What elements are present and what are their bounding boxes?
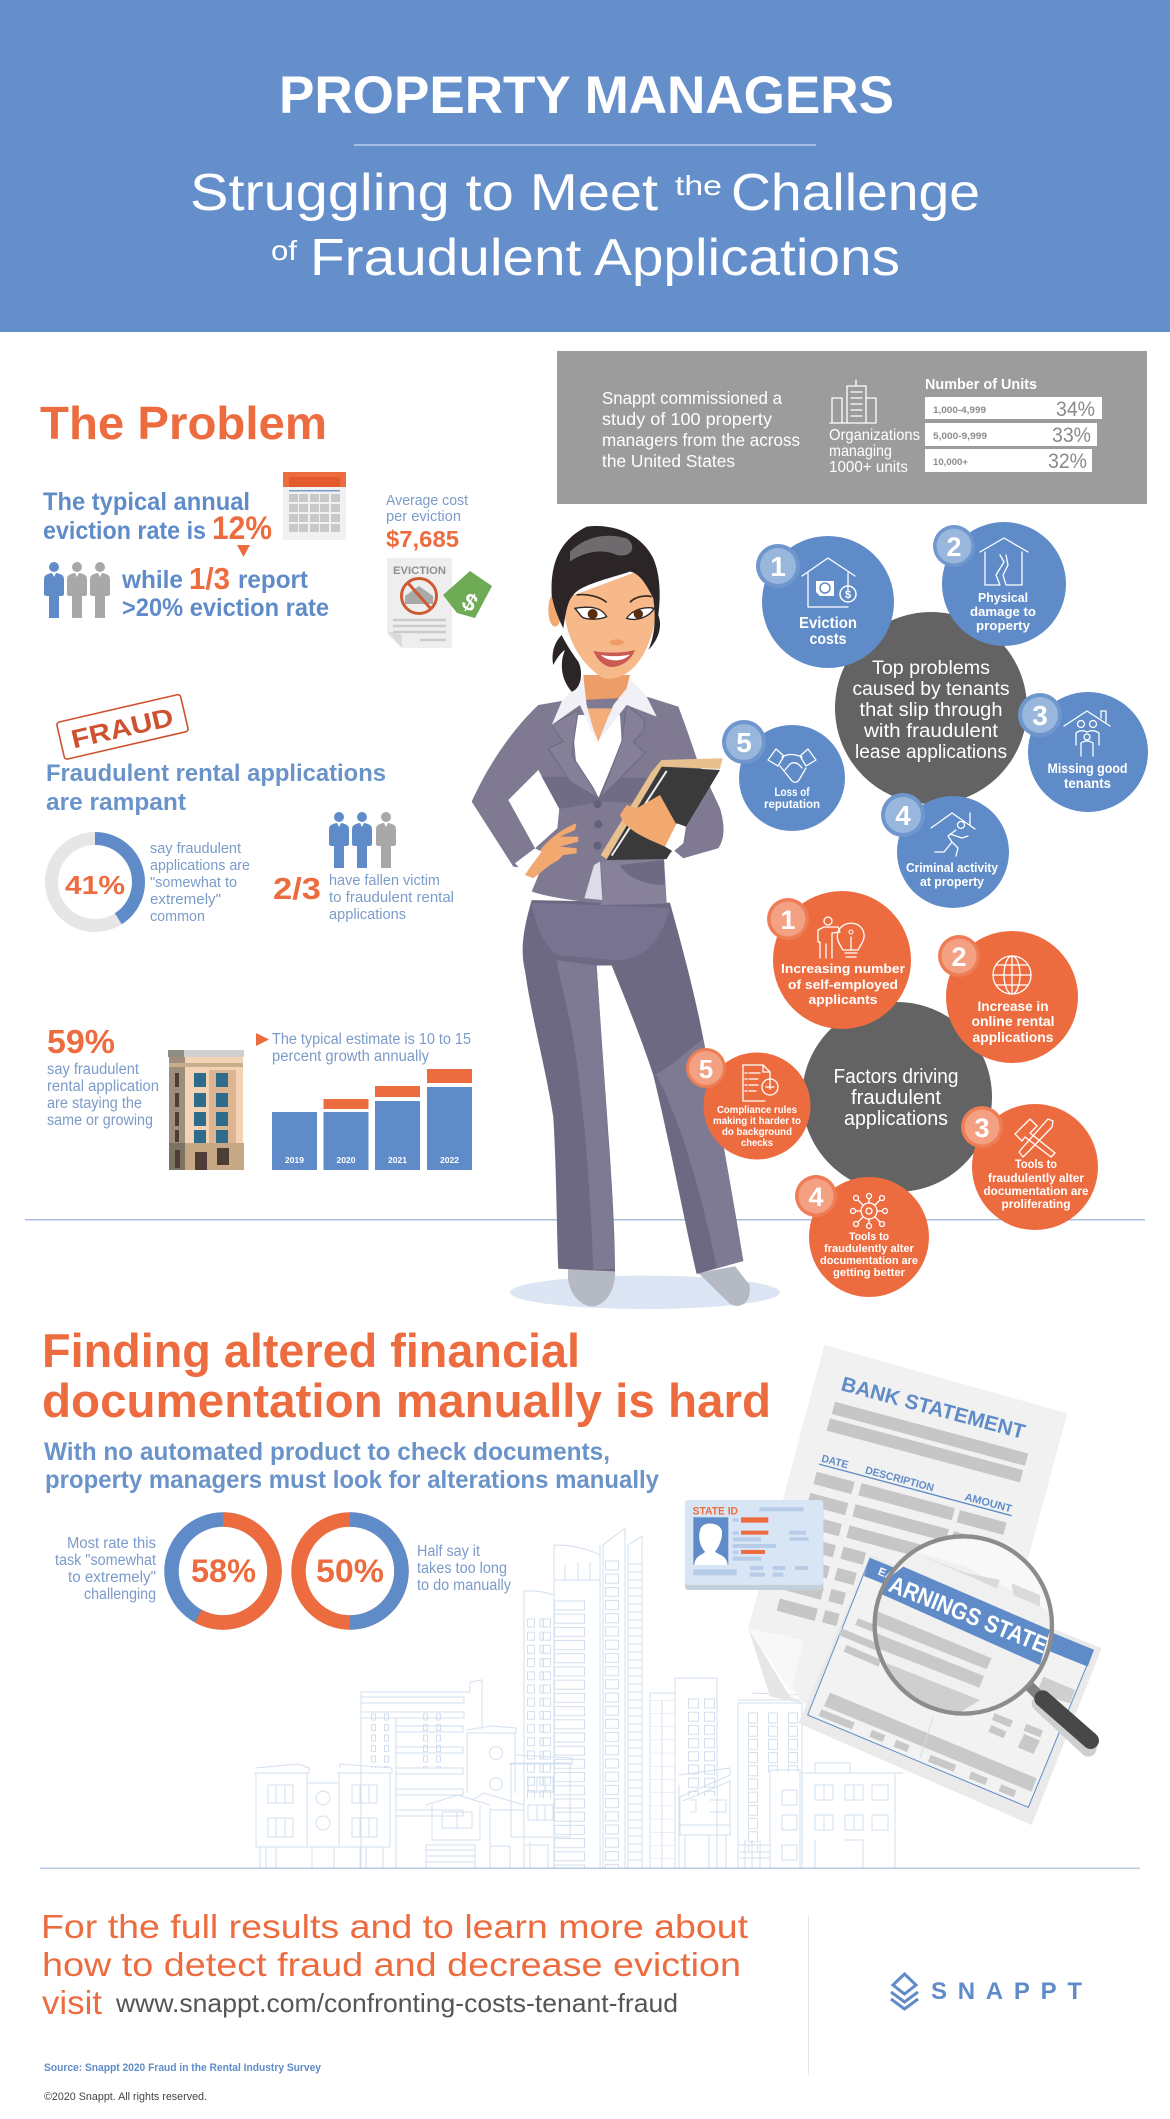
text: most rate this task challenging: task "somewhat — [55, 1552, 157, 1569]
hub: top problems: that slip through — [860, 700, 1002, 721]
average cost per eviction: per eviction — [386, 508, 461, 525]
footer call to action: how to detect fraud and decrease eviction — [42, 1946, 741, 1983]
one third statement: report — [238, 566, 309, 594]
icon: calendar — [283, 472, 346, 540]
bubble 4: tools getting better — [795, 1175, 929, 1297]
bank statement: DESCRIPTION — [864, 1465, 935, 1494]
bubble 2: physical damage: damage to — [970, 604, 1036, 619]
subtitle: of — [271, 235, 297, 266]
panel: study summary — [557, 351, 1147, 504]
panel: factors driving fraudulent applications — [686, 891, 1098, 1297]
hub: top problems: lease applications — [855, 742, 1007, 763]
bubble 2: physical damage — [933, 522, 1066, 646]
bubble 3: missing good tenants: tenants — [1064, 776, 1111, 791]
bubble 4: criminal activity: 4 — [895, 800, 911, 831]
hub: factors — [802, 1002, 992, 1192]
icon: apartment building — [168, 1050, 244, 1170]
icon: three people, two highlighted — [329, 812, 396, 868]
copyright: ©2020 Snappt. All rights reserved. — [44, 2091, 207, 2103]
donut: 41%: 41% — [65, 870, 125, 900]
hub: top problems: Top problems — [872, 658, 990, 679]
icon: eviction notice and price tag — [387, 558, 492, 648]
stat: two thirds fallen victim — [273, 871, 454, 923]
bubble 1: eviction costs: costs — [810, 631, 847, 648]
footer call to action: www.snappt.com/confronting-costs-tenant-fraud — [115, 1988, 678, 2018]
subtitle — [190, 164, 980, 287]
donut: 58% — [172, 1520, 274, 1622]
text: most rate this task challenging — [55, 1535, 157, 1603]
stat: two thirds fallen victim: to fraudulent rental — [329, 889, 454, 906]
source note: Source: Snappt 2020 Fraud in the Rental Industry Survey — [44, 2062, 322, 2074]
bar chart: estimated growth: The typical estimate is 10 to 15 — [272, 1031, 471, 1048]
number of units table — [925, 376, 1102, 473]
stamp: FRAUD — [56, 694, 189, 760]
earnings statement: EA — [876, 1566, 895, 1583]
bubble 1: eviction costs — [756, 536, 894, 668]
divider above footer — [40, 1868, 1140, 1869]
text: most rate this task challenging: to extremely" — [68, 1569, 156, 1586]
stat: two thirds fallen victim: 2/3 — [273, 871, 321, 906]
eviction rate statement: 12% — [212, 510, 272, 546]
subheading: look for alterations manually — [44, 1438, 659, 1494]
header banner — [0, 0, 1170, 332]
bubble 2: physical damage: Physical — [978, 590, 1028, 605]
bar chart: estimated growth: 2019 — [285, 1155, 304, 1165]
stat: 59%: same or growing — [47, 1112, 153, 1129]
number of units table: 5,000-9,999 — [933, 431, 987, 442]
bubble 2: online rental applications: applications — [972, 1030, 1054, 1045]
organizations label: Organizations — [829, 427, 920, 444]
bank statement: AMOUNT — [963, 1491, 1014, 1515]
bubble 2: online rental applications: 2 — [951, 942, 967, 972]
average cost per eviction: Average cost — [386, 492, 469, 509]
text: say fraudulent applications are common: say fraudulent — [150, 840, 242, 857]
average cost per eviction: $7,685 — [386, 526, 459, 552]
hub: top problems: caused by tenants — [852, 679, 1010, 700]
study description: managers from the across — [602, 430, 800, 450]
bubble 2: physical damage: property — [976, 618, 1031, 633]
bar chart: estimated growth: 2022 — [440, 1155, 459, 1165]
text: say fraudulent applications are common: common — [150, 908, 205, 925]
heading: The Problem: The Problem — [40, 397, 327, 449]
number of units table: 1,000-4,999 — [933, 405, 986, 416]
bubble 3: tools proliferating: 3 — [974, 1113, 990, 1143]
hub: factors: applications — [844, 1108, 948, 1130]
stat: 59%: 59% — [47, 1023, 115, 1060]
bubble 5: compliance rules — [686, 1048, 810, 1160]
bubble 1: self-employed applicants: Increasing number — [781, 961, 905, 976]
illustration: city skyline line art — [254, 1528, 903, 1868]
bubble 5: compliance rules: checks — [741, 1138, 774, 1149]
text: say fraudulent applications are common: extremely" — [150, 891, 221, 908]
eviction rate statement — [43, 488, 272, 557]
earnings statement — [798, 1555, 1102, 1825]
bubble 1: eviction costs: Eviction — [799, 615, 857, 632]
bubble 5: compliance rules: making it harder to — [713, 1116, 801, 1127]
heading: fraudulent rental applications: Fraudulent rental applications — [46, 760, 386, 787]
bubble 4: tools getting better: 4 — [808, 1182, 824, 1212]
study description: the United States — [602, 451, 735, 471]
heading: finding altered documentation — [42, 1324, 771, 1427]
subtitle: Struggling to Meet — [190, 164, 659, 222]
one third statement: >20% eviction rate — [122, 594, 329, 622]
number of units table: Number of Units — [925, 376, 1037, 393]
donut: 41% — [52, 838, 138, 926]
average cost per eviction — [386, 492, 469, 552]
bubble 3: missing good tenants: 3 — [1032, 700, 1048, 731]
bar chart: estimated growth: 2021 — [388, 1155, 407, 1165]
hub: factors: fraudulent — [851, 1087, 941, 1109]
stat: two thirds fallen victim: have fallen victim — [329, 872, 440, 889]
number of units table: 34% — [1056, 398, 1095, 421]
stat: two thirds fallen victim: applications — [329, 906, 406, 923]
stat: 59%: are staying the — [47, 1095, 142, 1112]
subtitle: the — [675, 170, 722, 201]
bubble 5: loss of reputation: Loss of — [774, 787, 810, 799]
bar chart: estimated growth — [256, 1031, 472, 1170]
bubble 4: criminal activity: Criminal activity — [906, 860, 999, 875]
bubble 1: eviction costs: $ — [845, 589, 851, 601]
bar chart: estimated growth: 2020 — [337, 1155, 356, 1165]
text: say fraudulent applications are common: "somewhat to — [150, 874, 237, 891]
bubble 4: tools getting better: documentation are — [820, 1255, 918, 1267]
bubble 3: tools proliferating: documentation are — [984, 1186, 1088, 1198]
footer call to action: visit — [42, 1984, 102, 2021]
bubble 4: tools getting better: getting better — [833, 1267, 906, 1279]
panel: top problems caused by fraudulent tenants — [722, 522, 1148, 908]
lower body: trousers and shoes — [510, 900, 780, 1309]
text: most rate this task challenging: Most rate this — [67, 1535, 156, 1552]
number of units table: 33% — [1052, 424, 1091, 447]
bubble 5: loss of reputation: reputation — [764, 799, 820, 811]
one third statement — [121, 561, 329, 622]
hub: top problems — [835, 612, 1027, 804]
bubble 3: tools proliferating: proliferating — [1002, 1199, 1070, 1211]
donut: 50% — [298, 1520, 402, 1622]
icon: office towers — [830, 380, 876, 423]
heading: finding altered documentation: documentation manually is hard — [42, 1374, 771, 1427]
bubble 3: missing good tenants: Missing good — [1048, 761, 1128, 776]
bank statement: DATE — [820, 1453, 850, 1471]
ID card: STATE ID — [693, 1505, 738, 1517]
text: half say it takes too long — [417, 1543, 511, 1594]
study description: Snappt commissioned a — [602, 388, 782, 408]
bar chart: estimated growth: percent growth annually — [272, 1048, 429, 1065]
bubble 1: self-employed applicants: of self-employed — [788, 977, 898, 992]
upper body: jacket, book and head — [472, 526, 724, 905]
organizations label — [829, 427, 920, 476]
bubble 1: self-employed applicants — [767, 891, 911, 1029]
hub: top problems: with fraudulent — [863, 721, 999, 742]
bubble 1: self-employed applicants: 1 — [780, 905, 796, 935]
one third statement: 1/3 — [189, 561, 230, 596]
text: half say it takes too long: to do manually — [417, 1577, 511, 1594]
bank statement: BANK STATEMENT — [839, 1373, 1028, 1444]
illustration: businesswoman — [472, 526, 780, 1309]
icon: three people, one highlighted — [44, 562, 110, 618]
heading: fraudulent rental applications: are rampant — [46, 789, 186, 816]
bubble 3: tools proliferating: fraudulently alter — [988, 1173, 1085, 1185]
magnifying glass — [873, 1536, 1091, 1748]
bubble 3: tools proliferating: Tools to — [1015, 1159, 1057, 1171]
bubble 2: online rental applications: Increase in — [978, 999, 1048, 1014]
icon: eviction notice and price tag: EVICTION — [393, 565, 446, 577]
donut: 58%: 58% — [191, 1553, 256, 1589]
bubble 4: tools getting better: Tools to — [849, 1231, 889, 1243]
stat: 59%: say fraudulent — [47, 1061, 140, 1078]
bubble 2: online rental applications — [938, 931, 1078, 1063]
magnifying glass: ARNINGS STATE — [885, 1571, 1051, 1659]
illustration: financial documents under magnifier — [685, 1345, 1102, 1825]
heading: finding altered documentation: Finding altered financial — [42, 1324, 580, 1377]
bubble 5: compliance rules: 5 — [699, 1054, 713, 1084]
bubble 3: tools proliferating — [961, 1104, 1098, 1230]
text: most rate this task challenging: challenging — [84, 1586, 156, 1603]
subtitle: Challenge — [731, 164, 980, 222]
footer call to action: For the full results and to learn more about — [41, 1908, 748, 1945]
stamp: FRAUD: FRAUD — [68, 702, 176, 754]
study description — [602, 388, 800, 471]
text: half say it takes too long: takes too long — [417, 1560, 507, 1577]
organizations label: 1000+ units — [829, 459, 908, 476]
subheading: look for alterations manually: With no automated product to check documents, — [44, 1438, 610, 1466]
number of units table: 32% — [1048, 450, 1087, 473]
bubble 3: missing good tenants — [1018, 692, 1148, 812]
subheading: look for alterations manually: property managers must look for alterations manually — [45, 1466, 659, 1494]
donut: 50%: 50% — [316, 1553, 384, 1589]
bubble 4: criminal activity: at property — [920, 874, 985, 889]
bubble 4: tools getting better: fraudulently alter — [824, 1243, 915, 1255]
text: say fraudulent applications are common — [150, 840, 250, 925]
one third statement: while — [121, 566, 183, 594]
bubble 2: online rental applications: online rental — [972, 1014, 1054, 1029]
bubble 1: eviction costs: 1 — [770, 551, 786, 582]
icon: eviction notice and price tag: $ — [457, 588, 483, 618]
bubble 5: compliance rules: do background — [722, 1127, 792, 1138]
footer call to action — [41, 1908, 748, 2021]
number of units table: 10,000+ — [933, 457, 968, 468]
eviction rate statement: eviction rate is — [43, 517, 206, 545]
subtitle: Fraudulent Applications — [310, 229, 900, 287]
hub: factors: Factors driving — [834, 1066, 958, 1088]
stat: 59%: rental application — [47, 1078, 159, 1095]
bubble 2: physical damage: 2 — [946, 532, 962, 562]
study description: study of 100 property — [602, 409, 772, 429]
ID card — [685, 1500, 823, 1590]
title: PROPERTY MANAGERS — [279, 66, 894, 125]
stat: 59% — [47, 1023, 159, 1129]
heading: fraudulent rental applications — [46, 760, 386, 816]
bubble 5: loss of reputation: 5 — [736, 727, 752, 758]
logo: Snappt: SNAPPT — [931, 1978, 1082, 2005]
text: say fraudulent applications are common: applications are — [150, 857, 250, 874]
bubble 5: loss of reputation — [722, 720, 845, 831]
organizations label: managing — [829, 443, 892, 460]
text: half say it takes too long: Half say it — [417, 1543, 481, 1560]
bubble 5: compliance rules: Compliance rules — [717, 1105, 798, 1116]
bubble 1: self-employed applicants: applicants — [808, 992, 878, 1007]
bank statement — [748, 1345, 1067, 1703]
bubble 4: criminal activity — [881, 793, 1009, 908]
logo: Snappt — [891, 1974, 1082, 2009]
eviction rate statement: The typical annual — [43, 488, 250, 516]
